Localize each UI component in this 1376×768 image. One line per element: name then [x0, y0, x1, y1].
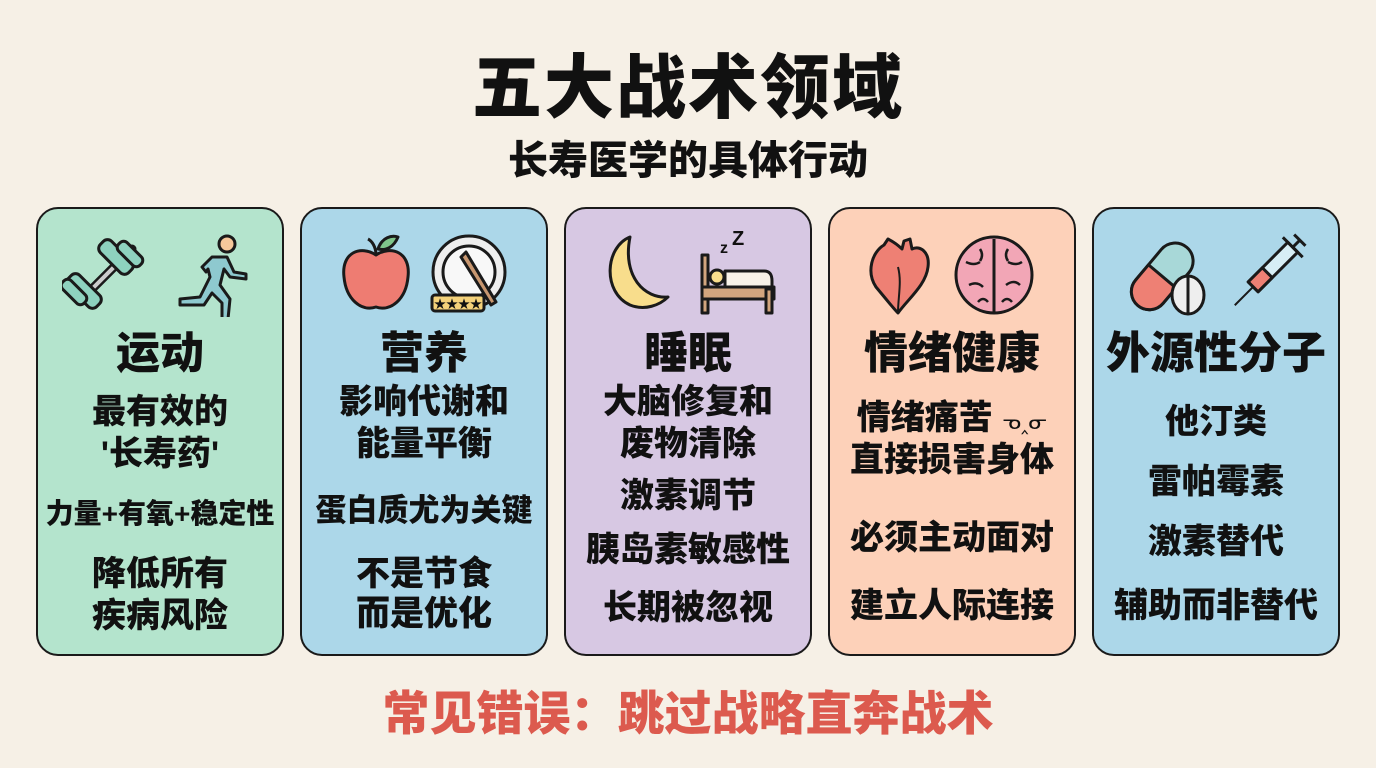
panel: sleep: 大脑修复和 — [603, 383, 773, 421]
panel: exogenous molecules: 激素替代 — [1148, 523, 1284, 561]
panel: sleep: 胰岛素敏感性 — [586, 531, 790, 569]
body text — [46, 393, 274, 635]
panel: nutrition: 影响代谢和 — [339, 383, 509, 421]
panel: sleep: 激素调节 — [620, 477, 756, 515]
panel: nutrition — [300, 207, 548, 656]
panel: exogenous molecules: 雷帕霉素 — [1148, 463, 1284, 501]
panel: sleep — [564, 207, 812, 656]
icon: moon and bed: Z — [732, 228, 744, 250]
panel: exercise: 疾病风险 — [92, 597, 228, 635]
panel: sleep: 长期被忽视 — [603, 589, 773, 627]
icon: moon and bed: z — [720, 240, 728, 257]
icon: apple and plate — [342, 234, 506, 312]
heading: 运动 — [116, 329, 204, 378]
bottom warning: 常见错误：跳过战略直奔战术 — [382, 687, 994, 740]
panel: nutrition: 而是优化 — [356, 595, 492, 633]
panel: exogenous molecules — [1092, 207, 1340, 656]
panel: emotional health: 必须主动面对 — [850, 519, 1054, 557]
subtitle: 长寿医学的具体行动 — [508, 139, 868, 183]
panel: nutrition: 蛋白质尤为关键 — [316, 493, 532, 528]
title: 五大战术领域 — [472, 49, 904, 127]
panel: exercise — [36, 207, 284, 656]
body text — [1114, 403, 1318, 625]
panel: exogenous molecules: 他汀类 — [1165, 403, 1267, 441]
heading: 睡眠 — [644, 329, 732, 378]
icon: apple and plate: ★★★★ — [434, 297, 482, 311]
panel: emotional health: 情绪痛苦 ᓀ‸ᓂ — [857, 399, 1047, 437]
icon: heart and brain — [869, 236, 1034, 315]
panel: emotional health — [828, 207, 1076, 656]
panel: exercise: 最有效的 — [92, 393, 228, 431]
panel: exercise: 降低所有 — [92, 555, 228, 593]
icon: pills and syringe — [1130, 234, 1306, 316]
panel: nutrition: 能量平衡 — [356, 425, 492, 463]
icon: dumbbell and runner — [62, 234, 248, 317]
heading: 营养 — [380, 329, 468, 378]
heading: 情绪健康 — [864, 329, 1040, 378]
panel: emotional health: 建立人际连接 — [850, 587, 1054, 625]
body text — [586, 383, 790, 627]
body text — [316, 383, 532, 633]
body text — [850, 399, 1054, 625]
panel: sleep: 废物清除 — [620, 425, 756, 463]
icon: moon and bed — [608, 228, 776, 314]
panel: emotional health: 直接损害身体 — [850, 441, 1054, 479]
panel: exercise: '长寿药' — [101, 435, 219, 473]
panel: nutrition: 不是节食 — [356, 555, 492, 593]
panel: exercise: 力量+有氧+稳定性 — [46, 498, 274, 529]
panel: exogenous molecules: 辅助而非替代 — [1114, 587, 1318, 625]
heading: 外源性分子 — [1106, 329, 1326, 378]
